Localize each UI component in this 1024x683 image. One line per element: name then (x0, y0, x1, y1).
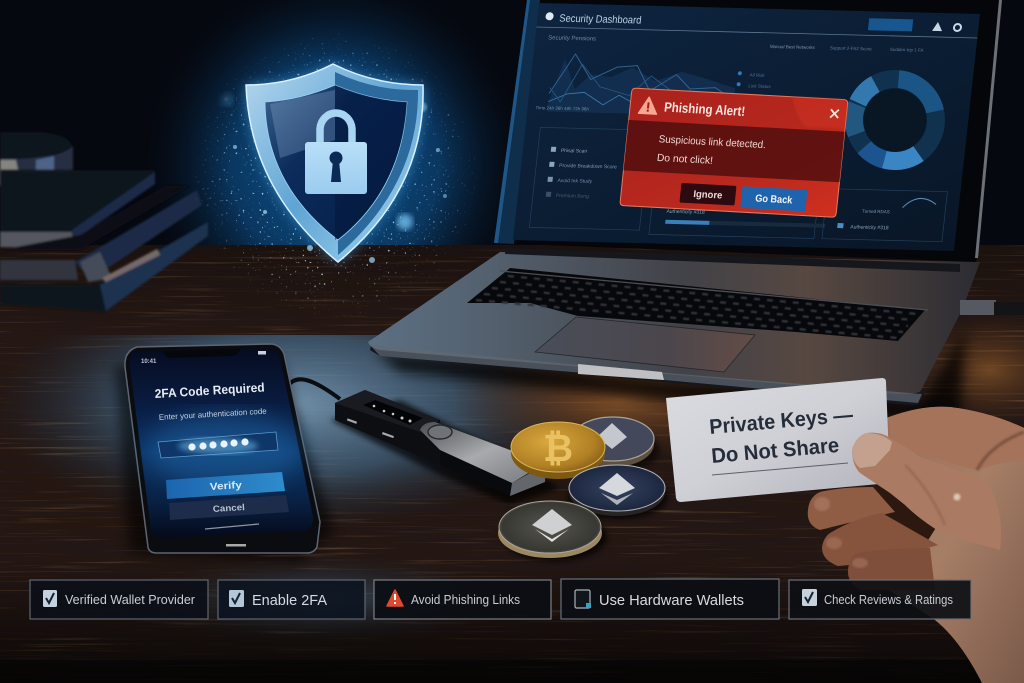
coin: bitcoin: ₿ (543, 428, 573, 470)
line chart panel (535, 35, 924, 121)
alert message: Suspicious link detected. (658, 134, 766, 151)
metal swivel (420, 422, 545, 483)
wallet screen (363, 400, 423, 425)
line chart panel: Link Status (748, 83, 772, 89)
card: private keys (666, 378, 890, 502)
button: verify: Verify (210, 480, 243, 493)
finger: middle (822, 513, 938, 566)
coin: silver back (572, 417, 654, 467)
tag: enable 2FA (218, 580, 365, 619)
left status list panel: Avoid Ink Study (557, 178, 593, 185)
line chart panel: Security Pensions (548, 35, 596, 43)
donut chart on dashboard (838, 63, 952, 177)
button: verify (166, 472, 285, 499)
icon: warning triangle (638, 97, 658, 114)
crypto coins (498, 417, 668, 561)
palm and back of hand (872, 407, 1024, 683)
stack of books (0, 170, 208, 312)
laptop base with keyboard and trackpad (368, 252, 1024, 405)
button: go back: Go Back (755, 193, 793, 207)
thumb over card (852, 433, 1001, 550)
finger: upper index behind card (888, 407, 1024, 470)
bottom progress panel: Authenticity #318 (666, 209, 705, 216)
card: private keys: Do Not Share (710, 434, 840, 468)
line chart panel: Time 24h 36h 48h 72h 96h (535, 105, 590, 112)
trackpad (535, 317, 755, 372)
laptop lid bezel (494, 0, 1002, 272)
tag: verified wallet provider (30, 580, 208, 619)
cable plug (960, 300, 1024, 315)
dashboard header (536, 10, 979, 38)
tag: verified wallet provider: Verified Wallet Provider (65, 592, 196, 607)
line chart panel: Sudden-trip 1 FA (890, 47, 924, 53)
shadow under laptop (375, 330, 965, 420)
button: go back (740, 186, 807, 211)
alert message: Do not click! (656, 153, 713, 167)
coin: ethereum silver (498, 501, 602, 558)
phone showing 2FA screen (115, 344, 334, 562)
bottom right gauge panel: Authenticity #318 (850, 224, 889, 231)
tag: enable 2FA: Enable 2FA (252, 592, 327, 609)
bottom progress panel (649, 196, 828, 239)
laptop screen: security dashboard (513, 3, 980, 251)
left status list panel: Phisal Scan (561, 148, 588, 155)
code input with dots (158, 432, 278, 458)
phone status bar: 10:41 (141, 359, 157, 365)
dashboard header: Security Dashboard (559, 13, 642, 27)
icon: padlock (305, 113, 367, 194)
tag: use hardware wallets (561, 579, 779, 619)
icon: close (830, 109, 839, 118)
phone heading: 2FA Code Required (154, 380, 265, 401)
coin: ethereum navy (569, 465, 665, 516)
tag: use hardware wallets: Use Hardware Wallets (599, 592, 744, 609)
bottom right gauge panel: Turned RDAS (862, 209, 890, 214)
wooden desk surface (0, 245, 1024, 683)
hardware wallet device (330, 390, 560, 505)
finger: lower index (808, 487, 895, 530)
button: ignore (679, 183, 736, 206)
tag: check reviews and ratings: Check Reviews & Ratings (824, 593, 953, 607)
line chart panel: Manual Best Networks (770, 44, 816, 50)
USB cable (288, 379, 340, 399)
checklist tags (30, 579, 971, 619)
metal ring object on books (0, 132, 73, 194)
keyboard (467, 268, 928, 341)
button: ignore: Ignore (693, 189, 724, 202)
tag: avoid phishing links: Avoid Phishing Links (411, 593, 520, 607)
button: cancel (169, 495, 289, 520)
hand behind card (808, 407, 1024, 683)
phishing alert dialog (620, 88, 848, 217)
icon: glowing security shield (246, 64, 423, 262)
alert message (656, 134, 766, 170)
button: cancel: Cancel (213, 502, 245, 514)
tag: check reviews and ratings (789, 580, 971, 619)
left status list panel (529, 127, 650, 230)
finger: ring (848, 548, 935, 590)
coin: bitcoin (511, 422, 605, 479)
alert title: Phishing Alert! (663, 99, 746, 119)
phone instruction: Enter your authentication code (159, 407, 267, 422)
left status list panel: Provide Breakdown Score (559, 163, 617, 170)
star particles around shield (195, 34, 477, 318)
line chart panel: All Risk (749, 72, 766, 78)
left status list panel: Premium Bung (556, 193, 589, 200)
line chart panel: Support 2-FA2 Score (830, 45, 873, 51)
bottom right gauge panel (822, 189, 947, 242)
tag: avoid phishing links (374, 580, 551, 619)
card: private keys: Private Keys — (708, 404, 854, 439)
